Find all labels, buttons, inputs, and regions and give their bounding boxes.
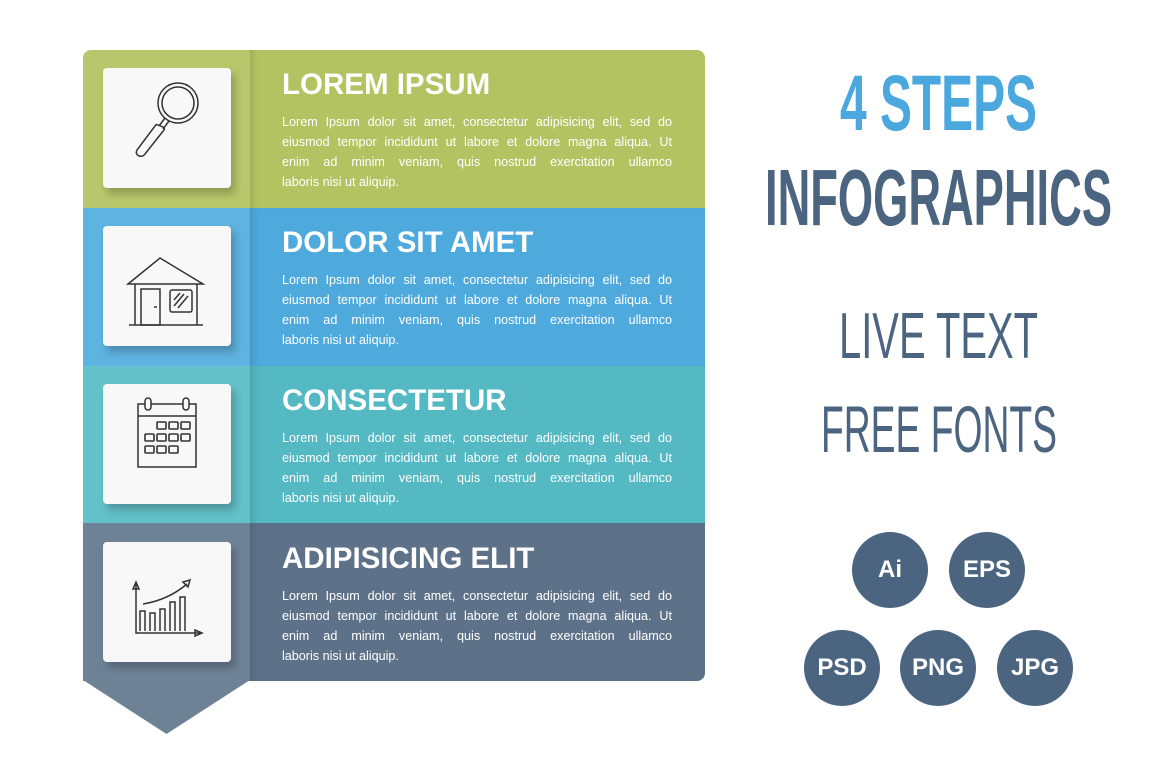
text 2: [282, 273, 672, 347]
text 1: enim ad minim veniam, quis nostrud exercitation ullamco: [282, 155, 672, 169]
badge: EPS: EPS: [963, 556, 1011, 583]
title 4: ADIPISICING ELIT: [282, 542, 534, 575]
text 2: eiusmod tempor incididunt ut labore et dolore magna aliqua. Ut: [282, 293, 672, 307]
badge: Ai: Ai: [878, 556, 902, 583]
badge: PNG: PNG: [912, 654, 964, 681]
text 1: Lorem Ipsum dolor sit amet, consectetur adipisicing elit, sed do: [282, 115, 672, 129]
badge: PSD: PSD: [817, 654, 867, 681]
panel: step 2: [83, 208, 705, 366]
title 2: DOLOR SIT AMET: [282, 226, 533, 259]
text 4: enim ad minim veniam, quis nostrud exercitation ullamco: [282, 629, 672, 643]
text 1: eiusmod tempor incididunt ut labore et dolore magna aliqua. Ut: [282, 135, 672, 149]
text 2: laboris nisi ut aliquip.: [282, 333, 399, 347]
icon: growth chart: [103, 542, 231, 662]
icon: magnifier: [103, 68, 231, 188]
badge: PNG: [900, 630, 976, 706]
panel: step 1: [83, 50, 705, 208]
text 4: [282, 589, 672, 663]
heading: right side: [765, 58, 1112, 466]
badge: Ai: [852, 532, 928, 608]
badge: EPS: [949, 532, 1025, 608]
text 3: laboris nisi ut aliquip.: [282, 491, 399, 505]
text 1: laboris nisi ut aliquip.: [282, 175, 399, 189]
text 1: [282, 115, 672, 189]
badge: JPG: JPG: [1011, 654, 1059, 681]
text 3: enim ad minim veniam, quis nostrud exercitation ullamco: [282, 471, 672, 485]
text 3: eiusmod tempor incididunt ut labore et dolore magna aliqua. Ut: [282, 451, 672, 465]
panel: step 4: [83, 523, 705, 734]
text 4: laboris nisi ut aliquip.: [282, 649, 399, 663]
text 3: [282, 431, 672, 505]
title 3: CONSECTETUR: [282, 384, 507, 417]
text 4: eiusmod tempor incididunt ut labore et dolore magna aliqua. Ut: [282, 609, 672, 623]
icon: calendar: [103, 384, 231, 504]
icon: house: [103, 226, 231, 346]
badge: PSD: [804, 630, 880, 706]
text 3: Lorem Ipsum dolor sit amet, consectetur adipisicing elit, sed do: [282, 431, 672, 445]
text 2: Lorem Ipsum dolor sit amet, consectetur adipisicing elit, sed do: [282, 273, 672, 287]
badge: JPG: [997, 630, 1073, 706]
text 2: enim ad minim veniam, quis nostrud exercitation ullamco: [282, 313, 672, 327]
panel: step 3: [83, 366, 705, 523]
text 4: Lorem Ipsum dolor sit amet, consectetur adipisicing elit, sed do: [282, 589, 672, 603]
title 1: LOREM IPSUM: [282, 68, 490, 101]
